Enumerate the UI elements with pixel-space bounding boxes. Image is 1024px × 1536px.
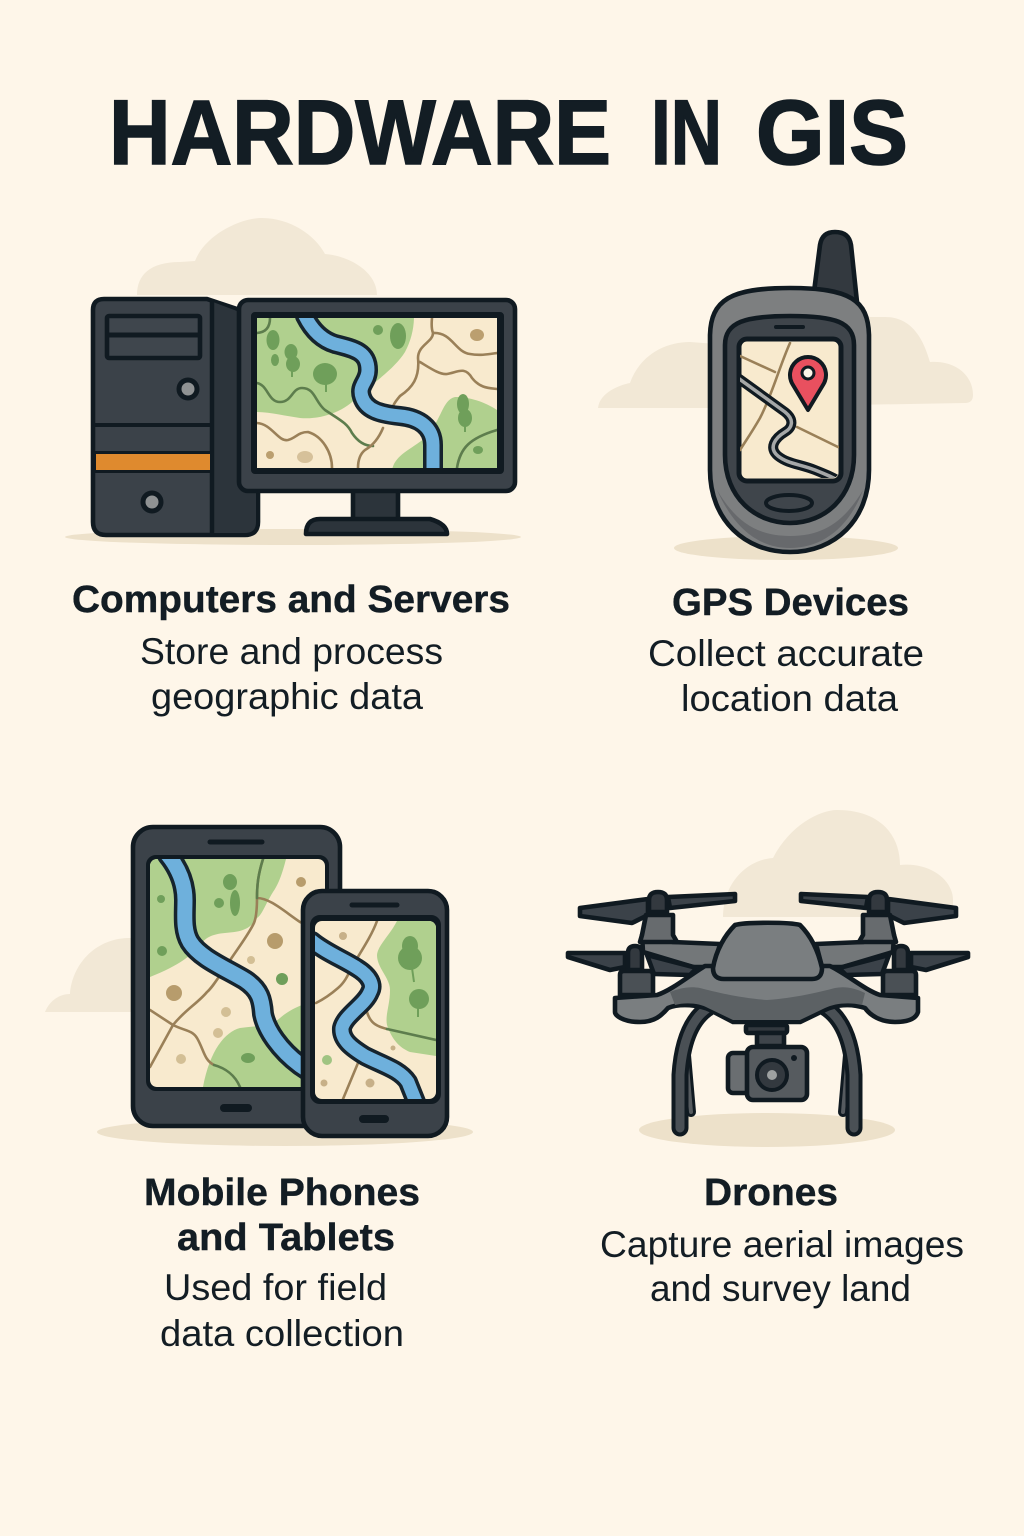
back-left rotor and arm — [580, 892, 735, 975]
back-right rotor and arm — [801, 892, 956, 975]
icon: location pin — [790, 357, 826, 410]
infographic canvas — [45, 99, 973, 1346]
description: Used for field — [164, 1267, 387, 1308]
heading: GPS Devices — [672, 582, 909, 624]
ground shadow — [65, 529, 521, 545]
panel: drones — [568, 810, 968, 1309]
ground shadow — [639, 1113, 895, 1147]
panel: computers and servers — [65, 218, 521, 717]
icon: drone — [568, 892, 968, 1128]
icon: computer tower — [93, 299, 258, 535]
description: location data — [681, 678, 898, 719]
background cloud — [137, 218, 377, 295]
description — [160, 1267, 404, 1354]
map on phone — [312, 921, 436, 1102]
camera — [728, 1047, 807, 1100]
description: Store and process — [140, 631, 443, 672]
title — [109, 82, 908, 184]
description: data collection — [160, 1313, 404, 1354]
camera gimbal — [746, 1025, 787, 1033]
drone dome — [713, 923, 822, 979]
icon: monitor with map — [239, 300, 515, 534]
front-right rotor — [883, 946, 968, 995]
description: geographic data — [151, 676, 423, 717]
heading: Computers and Servers — [72, 579, 510, 621]
map on GPS screen — [738, 343, 840, 482]
map on monitor — [255, 316, 497, 472]
description: and survey land — [650, 1268, 911, 1309]
description — [600, 1224, 964, 1309]
icon: phone with map — [303, 891, 447, 1136]
title: GIS — [756, 82, 908, 184]
description — [648, 633, 924, 719]
background cloud — [598, 317, 973, 408]
icon: GPS handheld — [710, 232, 869, 552]
description — [140, 631, 443, 717]
heading: Drones — [704, 1172, 838, 1214]
icon: tablet with map — [133, 827, 340, 1126]
background cloud — [45, 938, 140, 1012]
description: Capture aerial images — [600, 1224, 964, 1265]
heading: Mobile Phones — [144, 1172, 420, 1214]
background cloud — [723, 810, 953, 917]
heading: and Tablets — [177, 1217, 395, 1259]
ground shadow — [674, 536, 898, 560]
heading — [144, 1172, 420, 1259]
ground shadow — [97, 1118, 473, 1146]
drone main body — [615, 966, 918, 1022]
title: IN — [651, 82, 722, 184]
panel: mobile phones and tablets — [45, 827, 473, 1354]
panel: GPS devices — [598, 232, 973, 719]
title: HARDWARE — [109, 82, 611, 184]
description: Collect accurate — [648, 633, 924, 674]
front-left rotor — [568, 946, 653, 995]
map on tablet — [150, 855, 330, 1087]
landing legs — [680, 1008, 854, 1128]
